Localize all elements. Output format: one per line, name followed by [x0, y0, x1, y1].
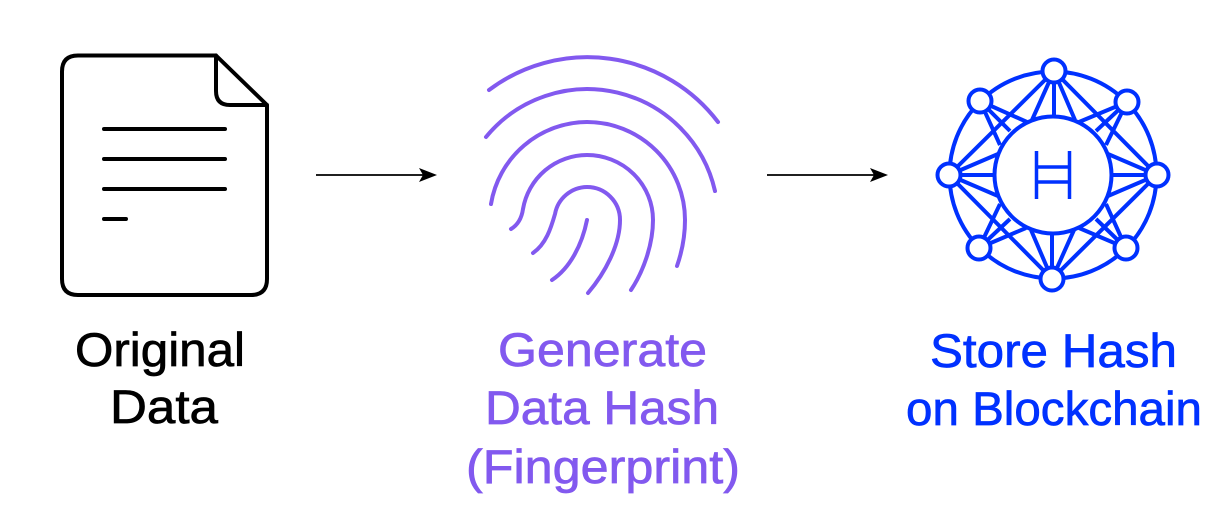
- label: Generate Data Hash (Fingerprint): Data Hash: [485, 381, 719, 434]
- icon: document: [62, 56, 267, 295]
- label: Generate Data Hash (Fingerprint): [466, 323, 740, 493]
- icon: Hedera network: [938, 60, 1168, 290]
- label: Original Data: [75, 323, 245, 433]
- arrow: hash to blockchain: [767, 168, 888, 182]
- arrow: data to hash: [316, 168, 437, 182]
- label: Store Hash on Blockchain: on Blockchain: [906, 382, 1202, 435]
- label: Original Data: Original: [75, 323, 245, 376]
- label: Generate Data Hash (Fingerprint): (Fingerprint): [466, 440, 740, 493]
- label: Store Hash on Blockchain: [906, 324, 1202, 435]
- icon: fingerprint: [486, 57, 718, 293]
- label: Store Hash on Blockchain: Store Hash: [930, 324, 1177, 377]
- label: Generate Data Hash (Fingerprint): Generate: [498, 323, 707, 376]
- label: Original Data: Data: [110, 380, 219, 433]
